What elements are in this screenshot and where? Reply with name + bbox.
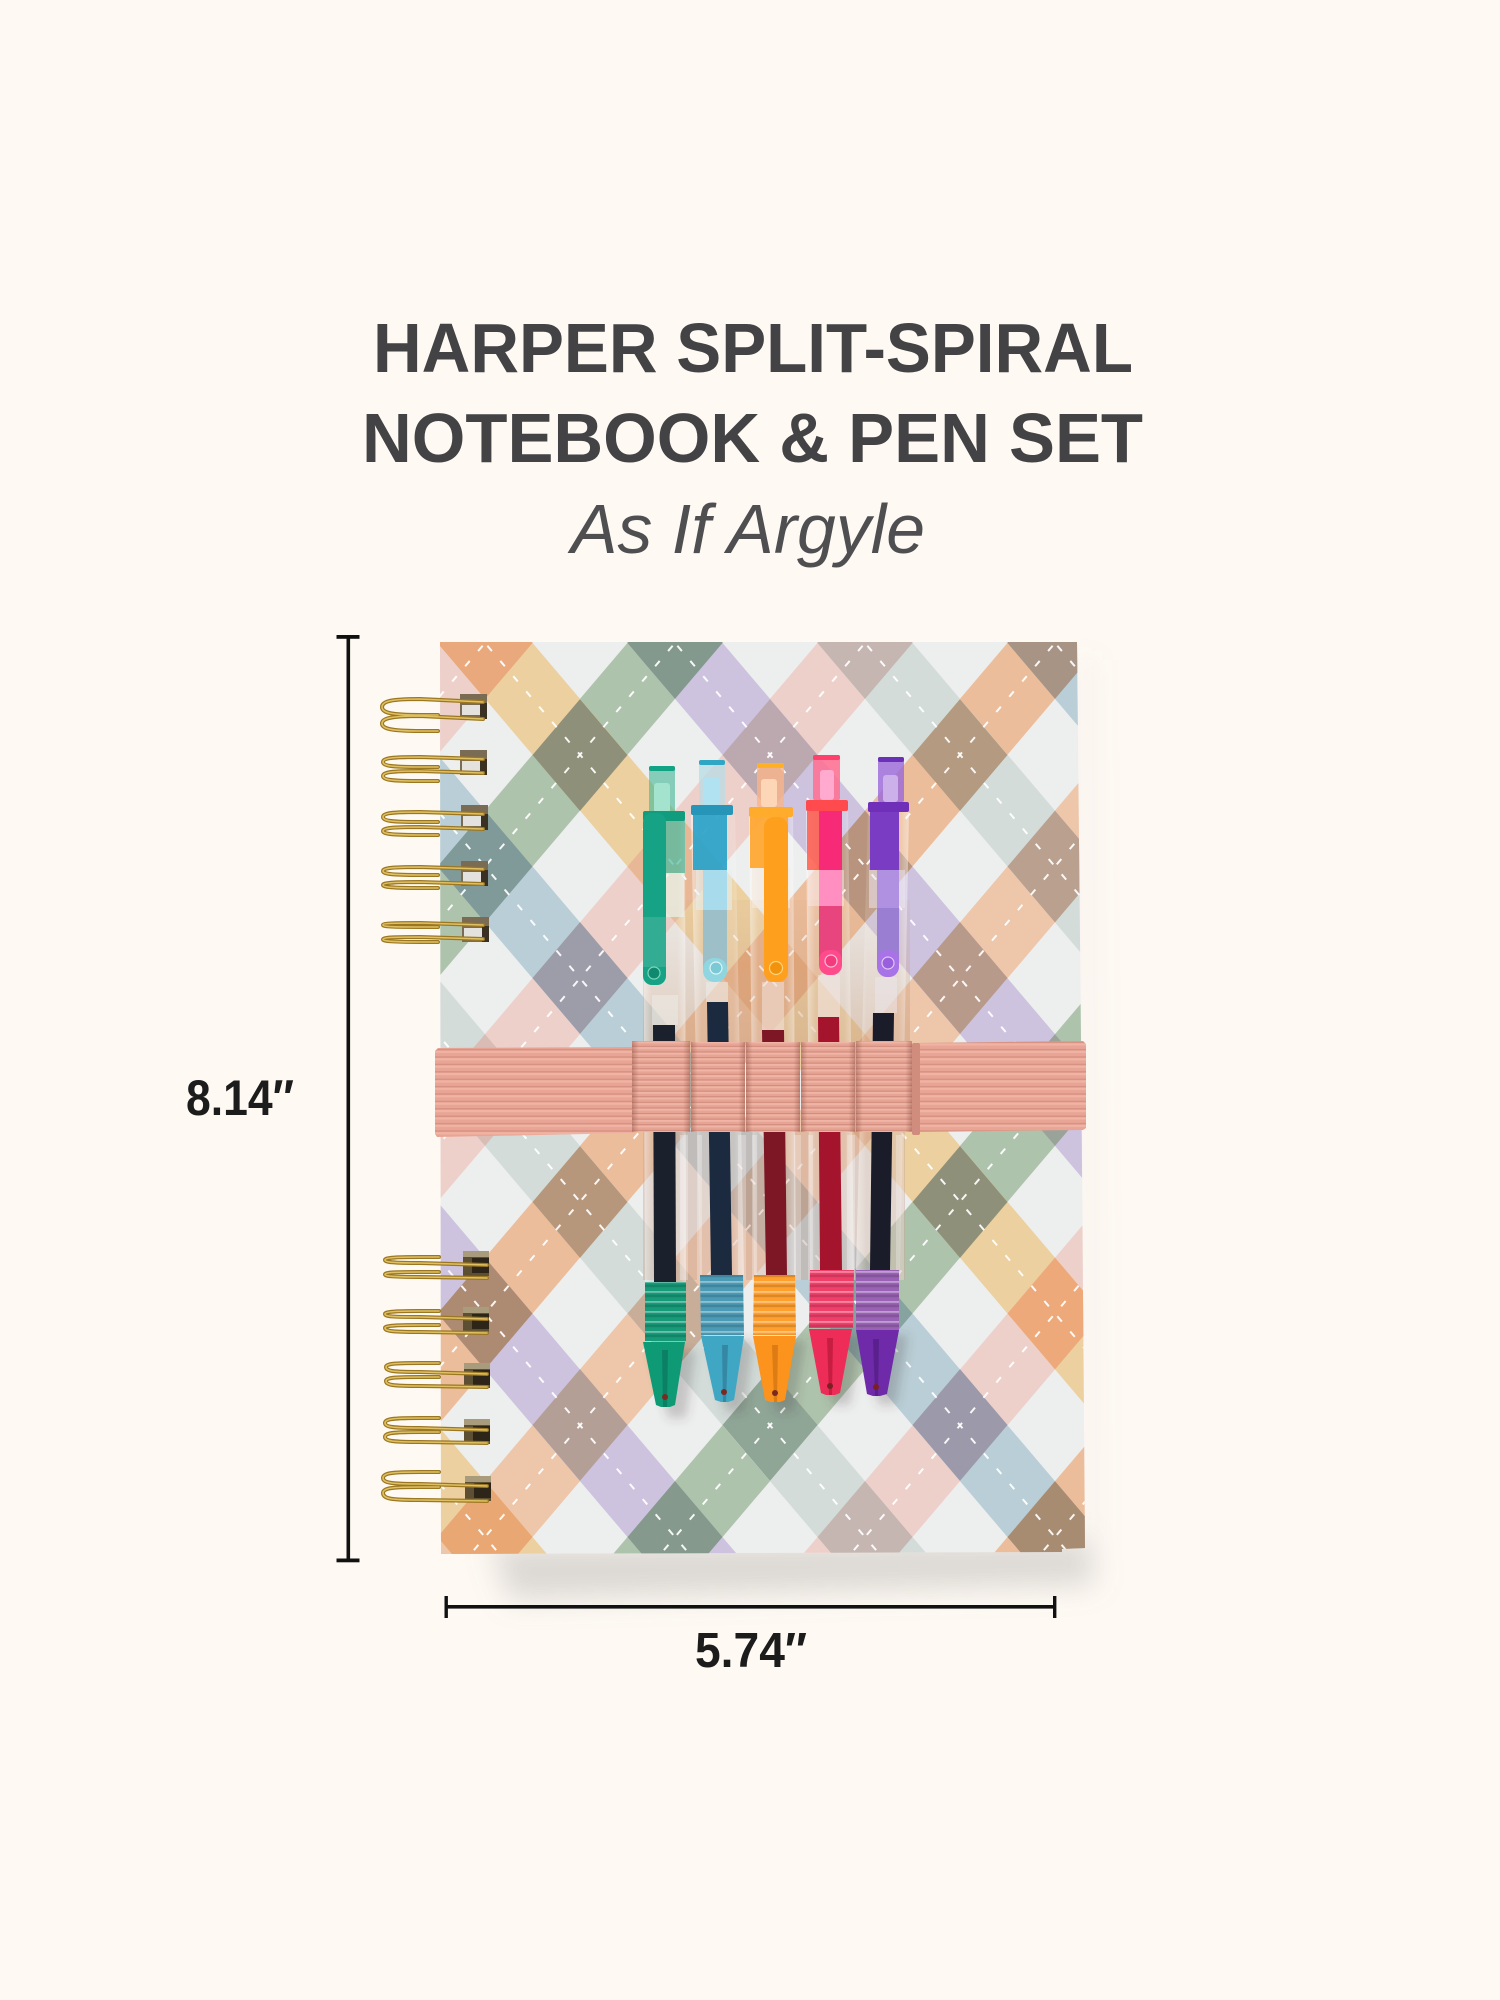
argyle bands running down-right — [440, 642, 1085, 1554]
height label: 8.14″ — [186, 1070, 294, 1126]
pen: green — [643, 766, 686, 1407]
gold wire loops — [382, 699, 487, 1501]
argyle band crossings — [438, 587, 1102, 1593]
width dimension line — [444, 1596, 1056, 1618]
elastic right section — [916, 1041, 1086, 1132]
binding holes — [460, 694, 491, 1501]
pen shadows — [650, 1335, 908, 1418]
pen: blue — [691, 760, 744, 1402]
pen: purple — [856, 757, 909, 1396]
wire binding: upper and lower ring sets — [382, 694, 491, 1501]
elastic left section — [435, 1047, 635, 1137]
title line 1: HARPER SPLIT-SPIRAL — [373, 309, 1133, 387]
argyle stitching — [440, 645, 1085, 1551]
title line 2: NOTEBOOK & PEN SET — [362, 399, 1143, 477]
pen loops — [632, 1041, 920, 1135]
width label: 5.74″ — [695, 1624, 807, 1678]
notebook cover — [440, 642, 1085, 1554]
pen: pink — [806, 755, 854, 1395]
elastic band with pen loops — [435, 1041, 1086, 1137]
refraction through clear pen barrels — [643, 900, 910, 1280]
subtitle: As If Argyle — [567, 490, 925, 568]
notebook shadow — [490, 660, 1096, 1600]
argyle bands running down-left — [440, 642, 1085, 1554]
pen: orange — [749, 763, 796, 1402]
title — [362, 309, 1143, 477]
height dimension line — [336, 635, 360, 1562]
infographic canvas — [187, 323, 1142, 1668]
